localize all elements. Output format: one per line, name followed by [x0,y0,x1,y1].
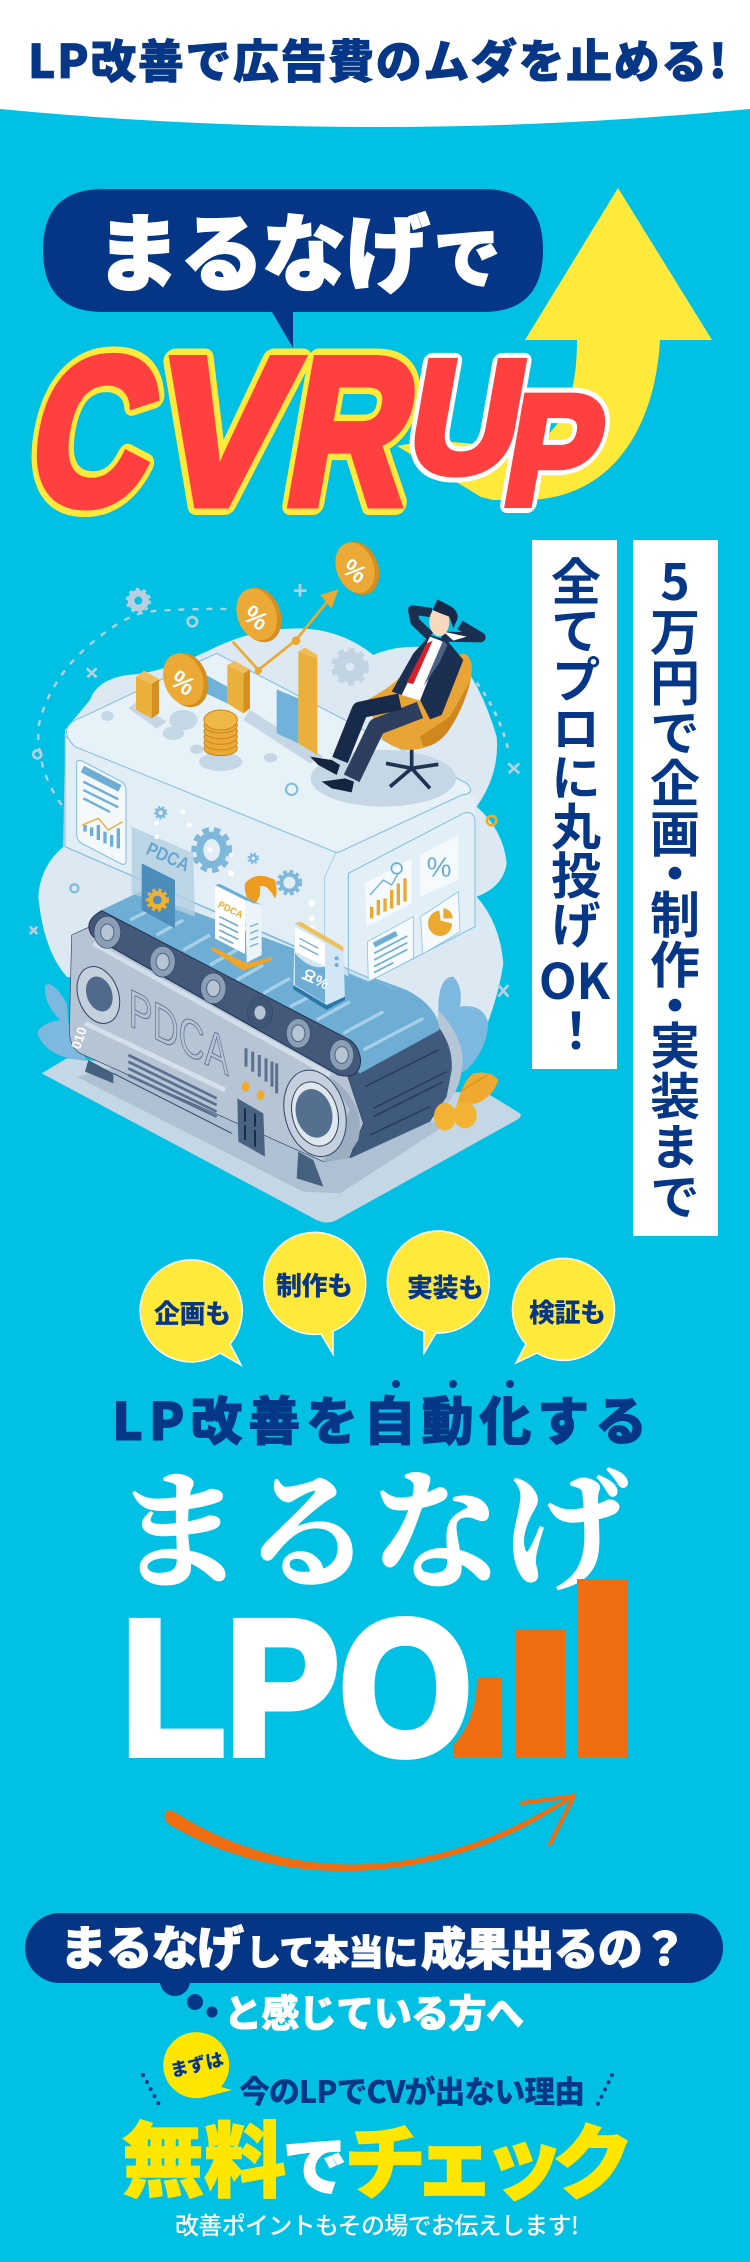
vertical label: 全てプロに丸投げOK！ [532,540,617,1069]
panel details: PDCA [129,978,229,1088]
percent coins: % [337,554,372,590]
letters CVR: C [15,315,176,549]
letters CVR [15,314,435,549]
vertical label: 5万円で企画・制作・実装まで: 5万円で企画・制作・実装まで [639,556,711,1222]
letters CVR: V [139,315,311,549]
PDCA card with gear [132,827,195,928]
panel details: 010 [69,1025,90,1051]
bars [453,1579,628,1757]
logo: まるなげ: まるなげ [115,1429,629,1616]
badge: まずは: まずは [168,2045,226,2083]
thought bubble: 成果出るの？ [421,1913,687,1978]
big drum cap [275,1063,355,1164]
letters UP: P [493,363,617,537]
vertical label: 全てプロに丸投げOK！: OK [539,943,610,1014]
heading: CVR UP [15,314,617,549]
speech bubble: まるなげで [43,188,543,348]
percent card [420,835,458,897]
headline: 無料でチェック: チェック [344,2097,634,2216]
blue percent card on conveyor [293,922,345,1010]
document card [367,917,413,982]
legs [352,710,420,778]
speech bubble: まるなげで: で [434,206,500,302]
letters UP: P [493,363,617,537]
businessman in chair [310,599,481,792]
dotted accents [143,2075,612,2110]
bubble text: まるなげ [60,1910,244,1979]
letters CVR: R [272,314,435,549]
vertical label: 全てプロに丸投げOK！: ！ [540,1005,612,1055]
glass box top surface [66,653,471,852]
background cloud [38,628,507,1063]
blue shadow panels [206,675,298,743]
speech bubble: まるなげで: まる [96,188,264,309]
letters UP [397,329,617,537]
coin stack [199,710,242,771]
percent coins: % [238,599,274,637]
header band [0,0,750,127]
letters CVR: V [139,315,311,549]
blue percent card on conveyor: 요% [299,966,332,993]
glass box faces [65,737,475,990]
ground plate [42,1058,521,1222]
letters UP: U [397,329,538,507]
bubble: 企画も [140,1260,242,1365]
left document card [77,760,126,864]
speech bubbles: process steps [140,1231,614,1365]
document on conveyor [212,884,273,971]
chair [386,748,438,788]
text: と感じている方へ: と感じている方へ [224,1983,524,2038]
text: 今のLPでCVが出ない理由: 今のLPでCVが出ない理由 [239,2067,585,2112]
letters CVR: C [15,315,176,549]
trend arrow [233,589,338,674]
gold leaf and coins [434,1072,498,1131]
percent coins: % [165,664,201,702]
ghost gear [333,650,367,683]
illustration: relaxed businessman on PDCA conveyor machine [30,536,521,1222]
orange swirl [245,876,277,905]
letters UP: U [397,329,538,507]
blue gears [155,807,301,894]
PDCA card with gear: PDCA [143,838,193,875]
panel details [69,961,277,1157]
dashed path and sparkles [30,584,519,997]
conveyor side band with rollers [89,911,361,1076]
headline: 無料でチェック: 無料 [122,2095,286,2214]
bubble: 企画も: 企画も [154,1294,231,1331]
arrow: orange swoosh [165,1796,574,1871]
chart card [365,858,412,927]
document on conveyor: PDCA [216,899,245,920]
bubble: 実装も: 実装も [407,1268,484,1305]
white data dots [154,809,315,931]
footnote: 改善ポイントもその場でお伝えします! [175,2206,579,2241]
bubble: 制作も [264,1232,366,1354]
blue leaves [37,977,488,1077]
machine side panel [69,927,363,1162]
conveyor belt top [102,892,439,1073]
right floating cards: % [427,852,452,883]
machine feet [85,1060,323,1187]
machine drum shell [430,1010,463,1107]
headline: 無料でチェック: で [283,2117,347,2209]
vertical label: 全てプロに丸投げOK！: 全てプロに丸投げ [540,556,612,948]
right floating cards [365,835,460,982]
headline: 無料でチェック [122,2095,634,2216]
surface spots [101,702,456,807]
logo: LPO with bars: LPO [121,1580,472,1795]
bubble: 制作も: 制作も [276,1266,353,1303]
header text: LP改善で広告費のムダを止める! [28,26,727,92]
thought bubble [25,1910,723,2018]
pie card [421,892,460,954]
tagline: LP改善を自動化する: LP改善を自動化する [112,1380,647,1455]
icon: yellow curved arrow [397,188,712,500]
speech bubble: まるなげで: なげ [262,188,430,309]
bubble: 実装も [387,1231,489,1353]
jacket [392,635,463,719]
bubble: 検証も [512,1258,614,1363]
letters CVR: R [272,314,435,549]
bubble: 検証も: 検証も [529,1293,606,1330]
orange bar chart [136,647,317,755]
arms and head [413,610,432,636]
thought bubble: して本当に [246,1925,418,1976]
percent coins [156,536,386,713]
badge: まずは [163,2032,232,2098]
